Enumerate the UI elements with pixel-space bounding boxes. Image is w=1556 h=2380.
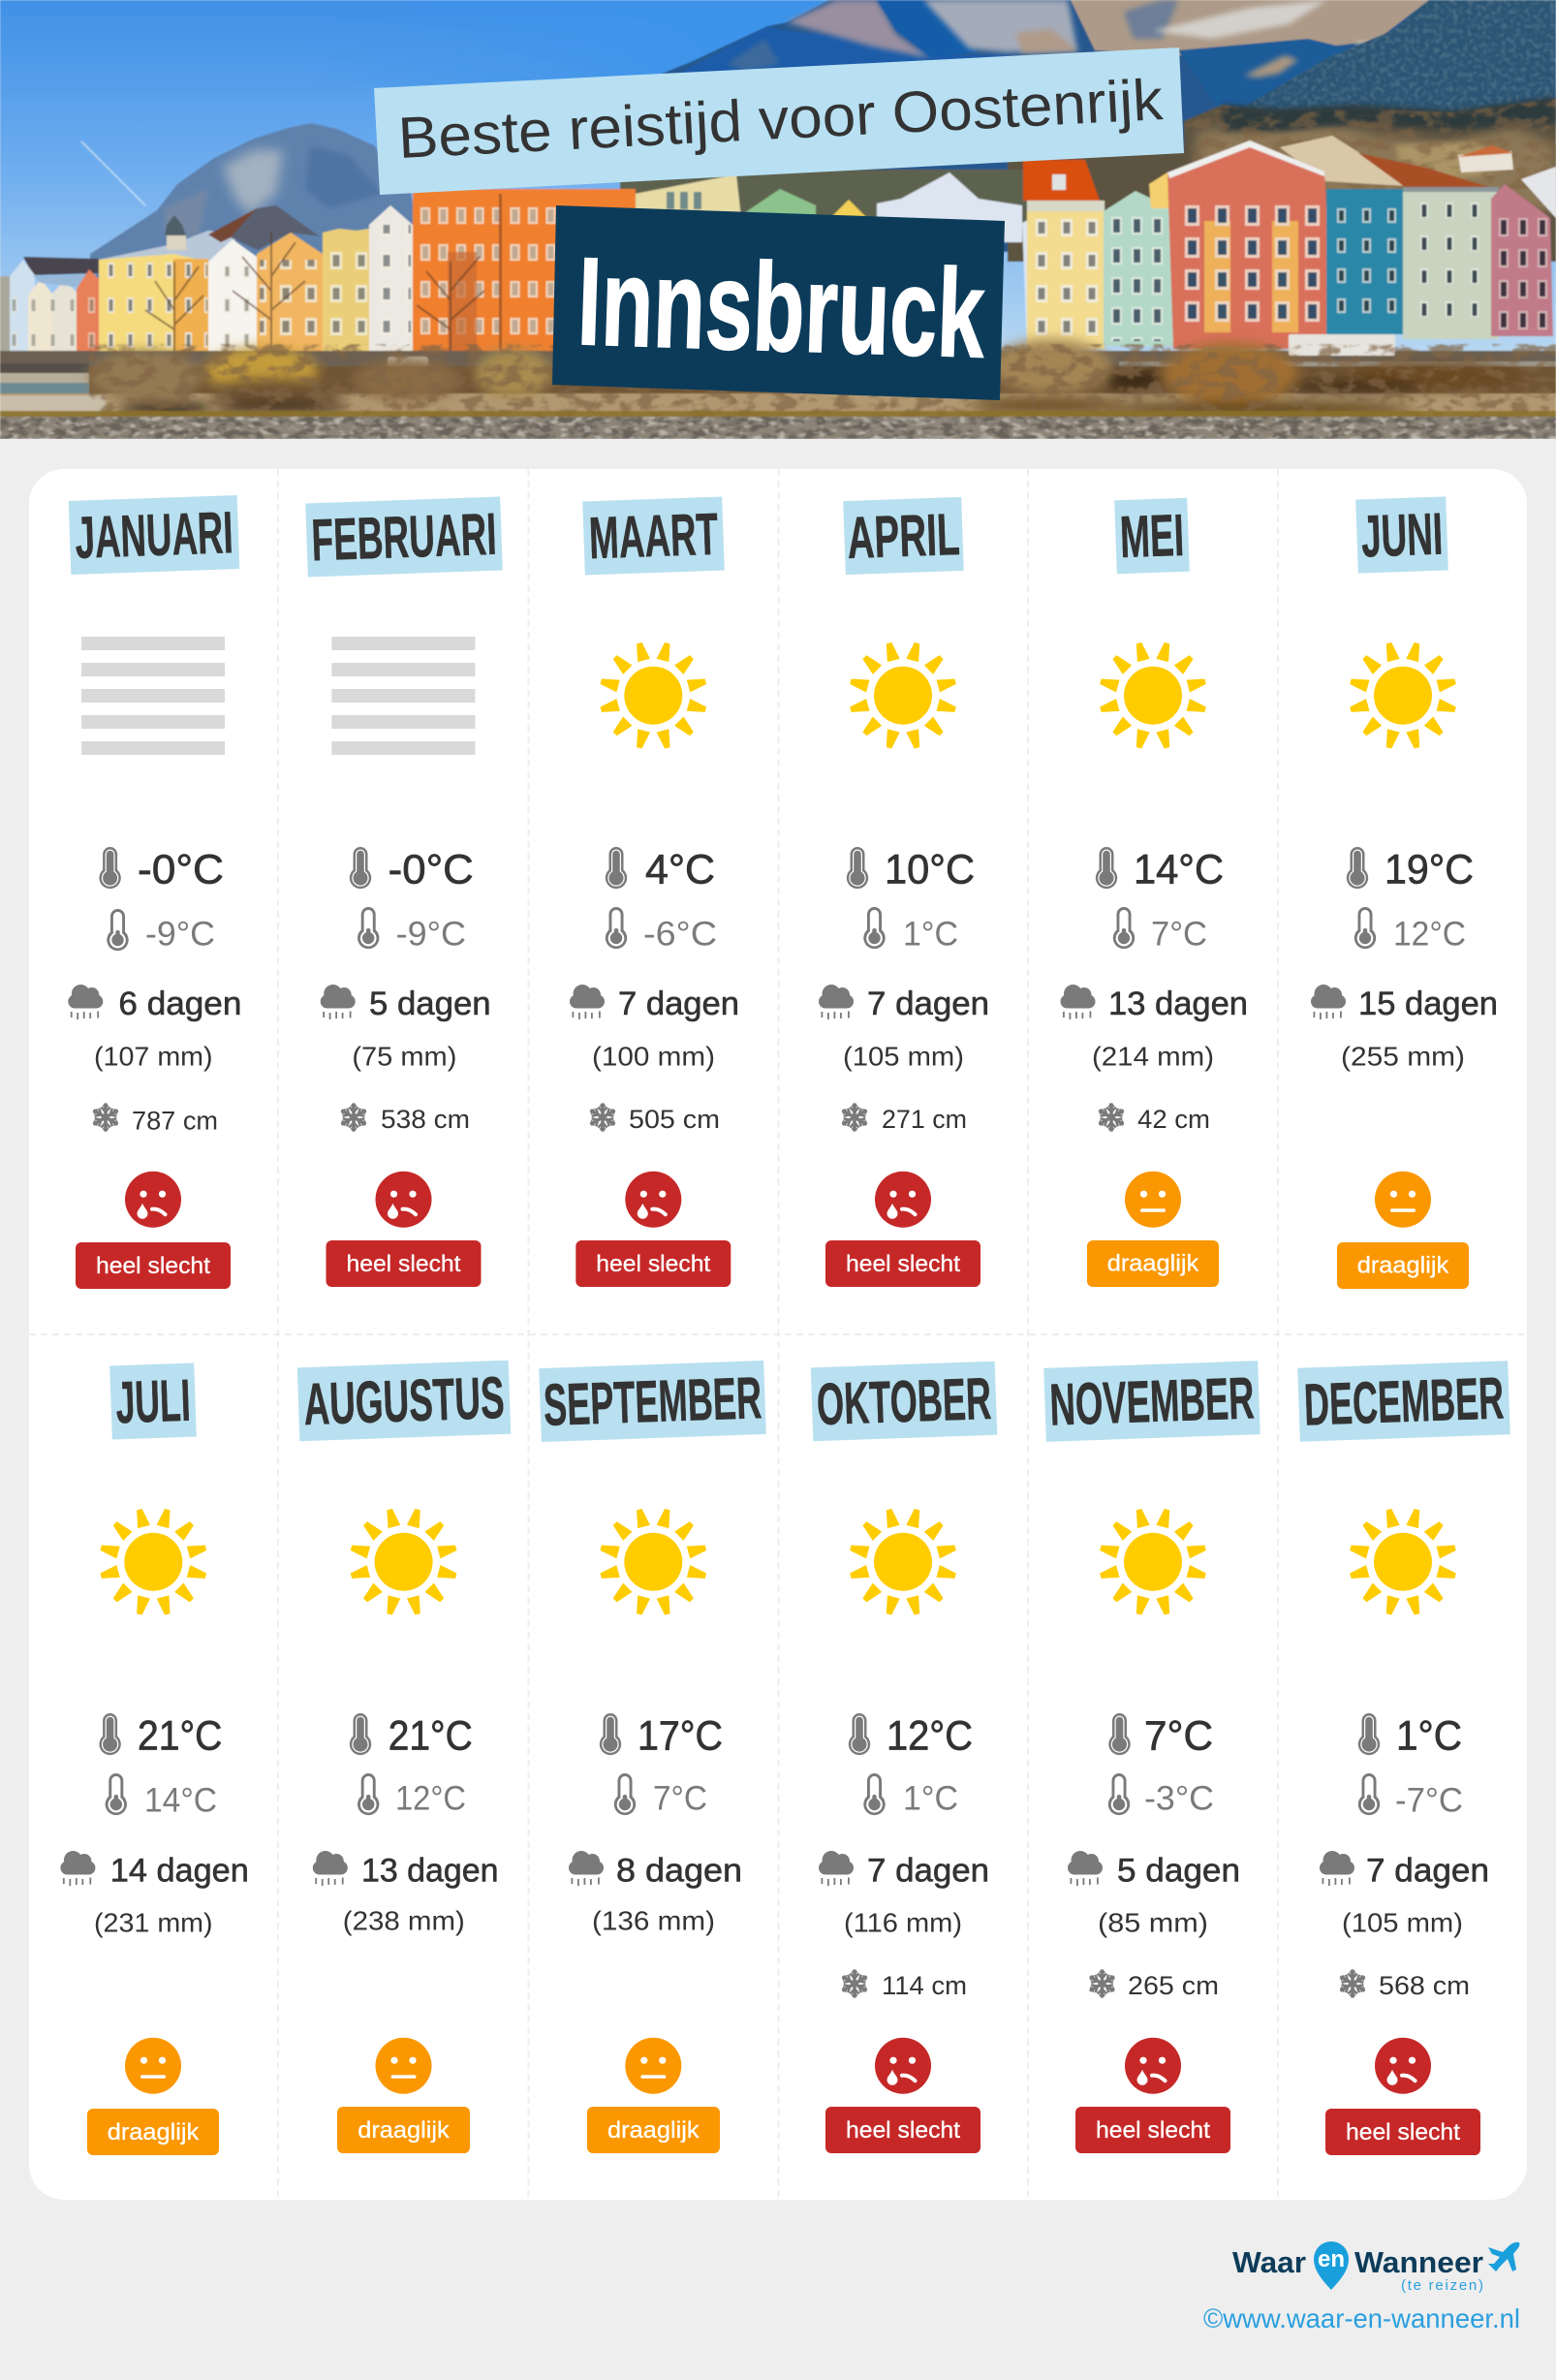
left mountain	[90, 123, 426, 291]
heading: mei	[1114, 498, 1190, 574]
rating badge	[337, 2107, 470, 2153]
building row right	[1022, 136, 1556, 349]
tree line on the slope	[1008, 97, 1556, 262]
max temperature	[1108, 1713, 1213, 1760]
rainfall: (255 mm)	[1341, 1041, 1465, 1071]
min temperature	[1113, 907, 1207, 954]
icon: sun	[599, 1508, 707, 1616]
heading: september	[539, 1361, 766, 1442]
heading: november	[1043, 1361, 1260, 1442]
month: januari	[68, 495, 241, 1289]
snow: 505 cm	[629, 1105, 720, 1134]
min temperature: 1°C	[903, 916, 958, 954]
snow: 568 cm	[1379, 1971, 1470, 2000]
min temperature	[106, 1773, 217, 1819]
rating badge	[87, 2109, 219, 2155]
rainfall: (214 mm)	[1092, 1041, 1214, 1071]
snow	[588, 1103, 720, 1134]
hero photo: Innsbruck colourful riverside houses with mountains	[0, 0, 1556, 439]
month: juli	[60, 1363, 249, 2155]
snow: 787 cm	[132, 1107, 218, 1136]
rating badge: heel slecht	[846, 1251, 960, 1277]
rain days: 13 dagen	[1108, 986, 1248, 1022]
rainfall: (100 mm)	[592, 1041, 715, 1071]
snow	[1087, 1969, 1219, 2000]
contrail	[81, 141, 145, 205]
max temperature	[600, 1713, 723, 1760]
rating badge: heel slecht	[347, 1251, 461, 1277]
month: februari	[305, 497, 503, 1287]
max temperature	[1096, 847, 1224, 893]
rain days: 5 dagen	[1117, 1853, 1240, 1890]
bushes and river bank	[0, 339, 1556, 419]
rain days: 5 dagen	[369, 986, 491, 1022]
rating badge: draaglijk	[1357, 1253, 1449, 1279]
rain days: 14 dagen	[110, 1853, 249, 1890]
min temperature	[863, 907, 958, 954]
max temperature: 17°C	[638, 1713, 723, 1760]
subtitle banner	[374, 47, 1184, 195]
rain days	[819, 1851, 989, 1890]
rain days: 6 dagen	[118, 986, 241, 1022]
min temperature	[1354, 907, 1466, 954]
logo: Waar en Wanneer: Wanneer	[1354, 2245, 1483, 2279]
month: april	[819, 497, 989, 1287]
heading: augustus: AUGUSTUS	[302, 1364, 506, 1437]
heading: februari: FEBRUARI	[310, 501, 498, 573]
month: mei	[1060, 498, 1248, 1287]
logo: Waar en Wanneer: Waar	[1232, 2245, 1306, 2279]
rating badge	[576, 1240, 731, 1287]
icon: map pin: en	[1318, 2246, 1345, 2272]
min temperature: -7°C	[1395, 1781, 1463, 1819]
max temperature	[606, 847, 715, 893]
heading: maart: MAART	[588, 501, 719, 571]
max temperature	[99, 847, 224, 893]
heading: november: NOVEMBER	[1048, 1364, 1256, 1438]
min temperature: 12°C	[1393, 916, 1466, 954]
rain days	[570, 985, 739, 1022]
rain days	[60, 1851, 249, 1890]
mid-strip houses above the city sign	[620, 170, 1037, 242]
month: juni	[1311, 496, 1498, 1289]
rain days: 15 dagen	[1358, 986, 1498, 1022]
month: november	[1043, 1361, 1260, 2153]
min temperature	[863, 1773, 958, 1817]
rainfall: (231 mm)	[94, 1907, 213, 1937]
snow	[91, 1103, 218, 1136]
rating icon	[125, 2038, 181, 2094]
rating icon	[1375, 2038, 1431, 2094]
max temperature: 21°C	[389, 1713, 473, 1760]
min temperature	[107, 909, 215, 954]
rain days: 13 dagen	[361, 1853, 498, 1890]
rainfall: (136 mm)	[592, 1906, 715, 1936]
rating badge	[326, 1240, 481, 1287]
icon: sun	[849, 1508, 957, 1616]
rating badge	[76, 1242, 231, 1289]
rain days: 8 dagen	[616, 1853, 742, 1890]
rating icon	[1125, 2038, 1181, 2094]
heading: februari	[305, 497, 503, 577]
min temperature: -3°C	[1144, 1779, 1214, 1817]
rain days	[569, 1851, 742, 1890]
heading: mei: MEI	[1119, 502, 1185, 570]
month: augustus	[297, 1361, 511, 2153]
icon: sun	[1349, 642, 1457, 750]
rain days: 7 dagen	[1366, 1853, 1489, 1890]
rock bank	[0, 417, 1556, 439]
panel: climate calendar card	[29, 469, 1527, 2200]
rating badge: draaglijk	[1107, 1251, 1199, 1277]
max temperature	[1358, 1713, 1462, 1760]
icon: sun	[350, 1508, 457, 1616]
rating badge	[1325, 2109, 1480, 2155]
icon: map pin	[1314, 2241, 1349, 2290]
heading: juli: JULI	[114, 1367, 192, 1435]
max temperature: 4°C	[645, 847, 715, 893]
building row left	[0, 205, 413, 363]
min temperature: 12°C	[395, 1779, 466, 1817]
rating icon	[1375, 1172, 1431, 1228]
rating icon	[376, 2038, 432, 2094]
max temperature: 14°C	[1134, 847, 1224, 893]
rain days	[321, 985, 491, 1022]
road and wall	[0, 334, 1556, 396]
heading: oktober: OKTOBER	[816, 1365, 992, 1437]
rain days: 7 dagen	[618, 986, 739, 1022]
month: maart	[570, 497, 739, 1287]
rating icon	[625, 1172, 681, 1228]
rating icon	[625, 2038, 681, 2094]
city title banner: Innsbruck	[576, 232, 987, 385]
rating icon	[125, 1172, 181, 1228]
rating badge	[825, 1240, 980, 1287]
max temperature	[849, 1713, 973, 1760]
min temperature	[614, 1773, 707, 1817]
heading: maart	[582, 497, 725, 575]
rating badge: draaglijk	[607, 2117, 700, 2144]
min temperature: -9°C	[396, 916, 466, 954]
max temperature	[847, 847, 975, 893]
min temperature	[358, 907, 466, 954]
month: december	[1297, 1361, 1510, 2155]
snow: 271 cm	[882, 1105, 967, 1134]
rainfall: (116 mm)	[844, 1907, 962, 1937]
snow	[840, 1969, 967, 2000]
rating badge	[1075, 2107, 1230, 2153]
rating badge: draaglijk	[358, 2117, 451, 2144]
heading: augustus	[297, 1361, 511, 1441]
rainfall: (107 mm)	[94, 1041, 213, 1071]
icon: airplane	[1488, 2242, 1519, 2271]
icon: sun	[849, 642, 957, 750]
rain days	[1068, 1851, 1240, 1890]
rating badge: heel slecht	[846, 2117, 960, 2144]
icon: fog	[81, 637, 225, 755]
max temperature: 1°C	[1396, 1713, 1462, 1760]
icon: sun	[99, 1508, 207, 1616]
rating badge: draaglijk	[108, 2119, 200, 2145]
max temperature: 10°C	[885, 847, 975, 893]
rainfall: (75 mm)	[352, 1041, 456, 1071]
rain days	[819, 985, 989, 1022]
heading: juni: JUNI	[1360, 501, 1444, 569]
min temperature: 7°C	[1151, 916, 1207, 954]
snow: 42 cm	[1137, 1105, 1210, 1134]
max temperature: 19°C	[1385, 847, 1474, 893]
min temperature: -6°C	[643, 916, 717, 954]
subtitle banner: Beste reistijd voor Oostenrijk	[396, 67, 1166, 171]
heading: september: SEPTEMBER	[543, 1364, 762, 1438]
max temperature: 21°C	[138, 1713, 222, 1760]
snow	[840, 1103, 967, 1134]
logo: Waar en Wanneer	[1232, 2241, 1519, 2294]
rating badge: heel slecht	[596, 1251, 711, 1277]
snow	[1338, 1969, 1470, 2000]
icon: sun	[1099, 1508, 1207, 1616]
heading: juni	[1355, 496, 1448, 574]
snow: 114 cm	[882, 1971, 967, 2000]
city title banner	[552, 205, 1005, 400]
rating badge: heel slecht	[1096, 2117, 1210, 2144]
heading: januari: JANUARI	[74, 499, 234, 571]
min temperature	[1358, 1773, 1463, 1819]
orange building	[413, 189, 636, 368]
max temperature: 12°C	[887, 1713, 973, 1760]
rating badge	[1337, 1242, 1469, 1289]
rating icon	[1125, 1172, 1181, 1228]
rainfall: (238 mm)	[343, 1906, 465, 1936]
heading: april: APRIL	[846, 501, 961, 571]
snow: 265 cm	[1128, 1971, 1219, 2000]
icon: sun	[599, 642, 707, 750]
snow	[339, 1103, 470, 1134]
heading: april	[843, 497, 964, 575]
min temperature	[358, 1773, 466, 1817]
rain days: 7 dagen	[867, 1853, 989, 1890]
icon: fog	[331, 637, 475, 755]
rainfall: (105 mm)	[843, 1041, 964, 1071]
rain days	[68, 985, 241, 1022]
logo: Waar en Wanneer: (te reizen)	[1401, 2277, 1483, 2294]
min temperature: 1°C	[903, 1779, 958, 1817]
icon: sun	[1349, 1508, 1457, 1616]
right mountain range	[620, 0, 1556, 252]
rainfall: (105 mm)	[1342, 1907, 1463, 1937]
snow	[1097, 1103, 1210, 1134]
rainfall: (85 mm)	[1098, 1907, 1208, 1937]
rating icon	[875, 2038, 931, 2094]
min temperature: -9°C	[145, 916, 215, 954]
rating icon	[875, 1172, 931, 1228]
rating badge: heel slecht	[96, 1253, 210, 1279]
rating badge	[825, 2107, 980, 2153]
max temperature: 7°C	[1144, 1713, 1213, 1760]
heading: juli	[109, 1363, 197, 1439]
heading: oktober	[811, 1362, 997, 1441]
bare trees	[145, 233, 484, 363]
min temperature: 7°C	[653, 1779, 707, 1817]
rating badge	[587, 2107, 720, 2153]
rain days	[1320, 1851, 1489, 1890]
max temperature	[99, 1713, 222, 1760]
max temperature	[1347, 847, 1474, 893]
snow: 538 cm	[381, 1105, 470, 1134]
rating badge: heel slecht	[1346, 2119, 1460, 2145]
min temperature: 14°C	[144, 1781, 217, 1819]
month: oktober	[811, 1362, 997, 2153]
max temperature	[350, 1713, 473, 1760]
min temperature	[1108, 1773, 1214, 1817]
heading: januari	[69, 495, 239, 575]
rain days: 7 dagen	[867, 986, 989, 1022]
max temperature: -0°C	[389, 847, 474, 893]
month: september	[539, 1361, 766, 2153]
min temperature	[606, 907, 717, 954]
rating badge	[1087, 1240, 1219, 1287]
max temperature: -0°C	[138, 847, 224, 893]
rating icon	[376, 1172, 432, 1228]
icon: sun	[1099, 642, 1207, 750]
website credit: ©www.waar-en-wanneer.nl	[1203, 2303, 1520, 2333]
max temperature	[350, 847, 474, 893]
